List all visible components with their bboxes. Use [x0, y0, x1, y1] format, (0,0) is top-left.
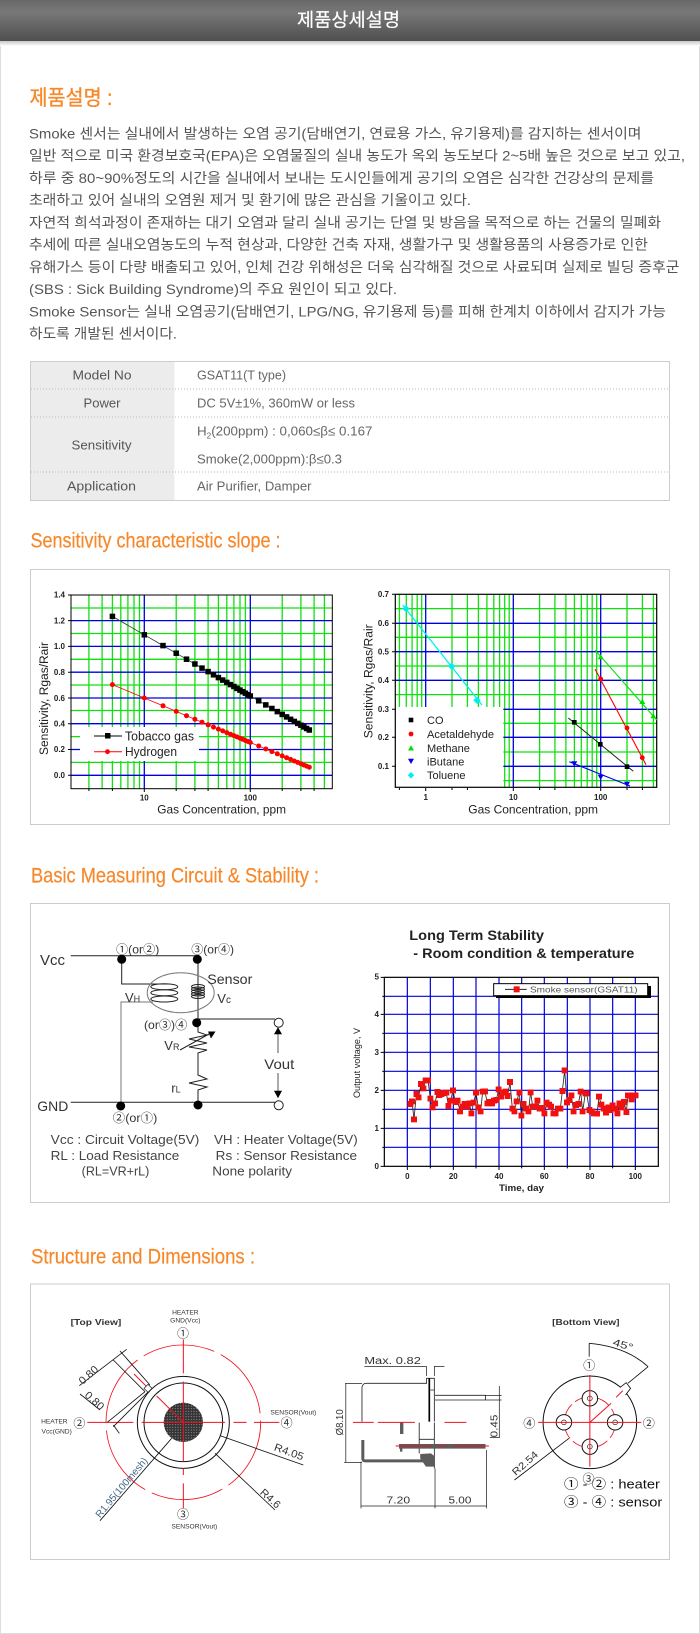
product description text: 추세에 따른 실내오염농도의 누적 현상과, 다양한 건축 자재, 생활가구 및 생활용품의 사용증가로 인한	[29, 237, 648, 253]
outer dashed circle	[106, 1345, 261, 1500]
top view labels: GND(Vcc)	[170, 1317, 200, 1324]
axis labels: 0.2	[54, 745, 66, 754]
axis labels: 0.4	[54, 720, 66, 728]
legend: Tobacco gas	[125, 730, 194, 744]
panel: circuit and stability	[30, 904, 670, 1202]
row: application	[67, 478, 312, 494]
axis labels: 1.0	[54, 642, 66, 651]
legend: CO	[427, 715, 444, 727]
series: CO	[568, 718, 633, 771]
top view labels: SENSOR(Vout)	[171, 1524, 217, 1531]
top view labels: 0.80	[77, 1364, 101, 1387]
row: sensitivity	[72, 424, 372, 467]
axis labels: 100	[594, 793, 608, 802]
variable arrow	[180, 1034, 209, 1050]
product description text: 하루 중 80~90%정도의 시간을 실내에서 보내는 도시인들에게 공기의 오염은 심각한 건강상의 문제를	[29, 170, 654, 186]
top view labels	[41, 1309, 316, 1531]
axis labels: 1.4	[54, 590, 66, 600]
row: power: DC 5V±1%, 360mW or less	[197, 396, 355, 411]
side view labels: Ø8.10	[335, 1409, 346, 1435]
axis labels: 0.6	[54, 694, 66, 703]
dashed pitch circle	[564, 1397, 615, 1448]
bottom view labels: ②	[643, 1416, 655, 1430]
heading: product description: 제품설명 :	[30, 87, 112, 110]
heading: sensitivity characteristic slope: Sensitivity characteristic slope :	[30, 528, 280, 552]
axis labels: 40	[495, 1172, 504, 1181]
body circle	[543, 1376, 637, 1469]
bottom view labels: ④	[523, 1416, 535, 1430]
axis labels: 0.1	[378, 762, 390, 771]
axis labels: 5	[375, 972, 380, 982]
axis labels: 1.2	[54, 616, 66, 626]
circuit legend: None polarity	[212, 1164, 293, 1178]
bottom view labels: ①	[583, 1358, 595, 1372]
axis labels: 0.7	[378, 590, 390, 599]
circuit labels: GND	[37, 1098, 68, 1114]
legend	[494, 984, 651, 998]
bottom view labels	[510, 1317, 655, 1486]
mesh	[164, 1403, 203, 1442]
dimension lines	[514, 1343, 648, 1480]
bottom view labels: ③	[582, 1472, 595, 1486]
legend: Hydrogen	[125, 745, 177, 759]
circuit legend: (RL=VR+rL)	[82, 1164, 149, 1178]
circuit legend: VH : Heater Voltage(5V)	[214, 1133, 358, 1147]
axis labels	[352, 972, 643, 1193]
center lines	[87, 1339, 279, 1508]
legend: Acetaldehyde	[427, 729, 494, 741]
top view labels: R4.05	[272, 1442, 305, 1463]
heading: structure and dimensions: Structure and Dimensions :	[31, 1244, 255, 1268]
bottom view labels: R2.54	[510, 1449, 541, 1478]
product description text: 하도록 개발된 센서이다.	[29, 326, 177, 342]
axis labels: Sensitivity, Rgas/Rair	[364, 624, 376, 738]
drawing: bottom view	[510, 1317, 663, 1510]
chart: long term stability	[352, 928, 658, 1193]
nodes	[116, 955, 283, 1110]
series: tobacco gas	[112, 616, 309, 730]
axis labels: 10	[509, 793, 518, 802]
axis labels: 0.8	[54, 668, 66, 677]
axis labels: 100	[629, 1172, 643, 1181]
series: acetaldehyde	[595, 669, 646, 765]
center lines	[538, 1375, 641, 1467]
circuit labels: Sensor	[207, 971, 253, 987]
axis labels: 0.2	[378, 733, 390, 742]
series: ibutane	[569, 761, 630, 787]
axis labels: 0.3	[378, 705, 390, 714]
chart title	[409, 928, 635, 961]
legend	[396, 707, 503, 787]
product description text: 자연적 희석과정이 존재하는 대기 오염과 달리 실내 공기는 단열 및 방음을 목적으로 하는 건물의 밀폐화	[29, 214, 661, 230]
row: sensitivity: Sensitivity	[72, 438, 132, 452]
pin legend: ③ - ④ : sensor	[564, 1495, 663, 1510]
axis labels: 1	[375, 1124, 380, 1133]
axis labels: Gas Concentration, ppm	[157, 802, 286, 816]
housing outline	[362, 1378, 486, 1468]
product description text	[29, 126, 685, 342]
circuit diagram	[37, 942, 358, 1178]
pin legend: ① - ② : heater	[564, 1477, 660, 1492]
circuit labels: VH	[125, 990, 140, 1005]
row: model no: Model No	[72, 368, 132, 383]
resistors	[189, 1022, 207, 1102]
chart title: Long Term Stability	[409, 928, 545, 943]
circuit legend: Vcc : Circuit Voltage(5V)	[51, 1133, 199, 1147]
axis labels: 3	[375, 1048, 380, 1057]
row: sensitivity: Smoke(2,000ppm):β≤0.3	[197, 452, 342, 467]
series: smoke sensor	[410, 1070, 636, 1119]
dimension lines	[79, 1349, 303, 1521]
legend: Smoke sensor(GSAT11)	[530, 984, 638, 994]
axis labels: 0	[375, 1162, 380, 1171]
bottom view labels: [Bottom View]	[552, 1317, 620, 1327]
drawing: side view	[335, 1356, 502, 1508]
series: hydrogen	[112, 685, 309, 767]
axis labels: Output voltage, V	[352, 1028, 362, 1098]
top view labels: ③	[177, 1507, 189, 1521]
top view labels: R1.95(100mesh)	[94, 1456, 151, 1520]
top view labels: R4.6	[257, 1487, 283, 1511]
header title: 제품상세설명	[297, 10, 400, 30]
side view labels: Max. 0.82	[364, 1356, 421, 1367]
top view labels: HEATER	[41, 1419, 68, 1426]
product description text: (SBS : Sick Building Syndrome)의 주요 원인이 되고 있다.	[29, 281, 397, 297]
circuit labels: Vc	[217, 991, 231, 1006]
series: methane	[595, 650, 657, 720]
row: power	[84, 396, 355, 411]
circuit labels: ②(or①)	[113, 1111, 157, 1125]
circuit labels: rL	[171, 1080, 181, 1096]
product description text: 유해가스 등이 다량 배출되고 있어, 인체 건강 위해성은 더욱 심각해질 것으로 사료되며 실제로 빌딩 증후군	[29, 259, 680, 275]
legend: Toluene	[427, 770, 466, 782]
axis labels: 4	[375, 1010, 380, 1019]
bottom view labels: 45°	[611, 1337, 634, 1354]
chart: tobacco gas and hydrogen sensitivity	[39, 590, 332, 816]
chart: gas selectivity	[364, 590, 657, 816]
row: model no: GSAT11(T type)	[197, 368, 286, 383]
pin legend	[564, 1477, 663, 1510]
top view labels: ④	[281, 1416, 293, 1430]
axis labels: 0.4	[378, 676, 390, 685]
panel: sensitivity charts	[30, 570, 670, 824]
circuit labels: ③(or④)	[191, 942, 234, 956]
circuit legend: Rs : Sensor Resistance	[216, 1149, 357, 1163]
pins	[556, 1391, 623, 1454]
row: application: Application	[67, 478, 136, 494]
side view labels	[335, 1356, 500, 1507]
center lines	[353, 1422, 489, 1446]
axis labels	[39, 590, 286, 816]
axis labels: 1	[423, 793, 428, 802]
dimension lines	[344, 1366, 502, 1508]
side view labels: 7.20	[387, 1496, 411, 1507]
axis labels: 10	[140, 794, 149, 802]
row: application: Air Purifier, Damper	[197, 478, 312, 494]
row: power: Power	[84, 396, 121, 411]
legend	[80, 727, 199, 761]
top view labels: 0.80	[82, 1389, 106, 1413]
axis labels: 20	[449, 1172, 458, 1181]
axis labels: 0.0	[54, 771, 66, 780]
axis labels	[364, 590, 608, 816]
circuit legend	[51, 1133, 358, 1178]
side view labels: 0.45	[489, 1414, 500, 1437]
product description text: 초래하고 있어 실내의 오염원 제거 및 환기에 많은 관심을 기울이고 있다.	[29, 192, 471, 208]
axis labels: 60	[540, 1172, 549, 1181]
sensor element	[147, 973, 214, 1013]
top view labels: Vcc(GND)	[42, 1429, 72, 1436]
heading: basic measuring circuit and stability: Basic Measuring Circuit & Stability :	[31, 864, 319, 888]
circuit labels: Vout	[264, 1056, 294, 1072]
row: sensitivity: (200ppm) : 0,060≤β≤ 0.167	[211, 424, 372, 439]
circuit labels: Vcc	[40, 952, 65, 969]
axis labels: Sensitivity, Rgas/Rair	[39, 642, 51, 755]
sectioned parts	[361, 1423, 486, 1467]
row: sensitivity: H	[197, 424, 206, 439]
product description text: Smoke 센서는 실내에서 발생하는 오염 공기(담배연기, 연료용 가스, 유기용제)를 감지하는 센서이며	[29, 126, 642, 142]
top view labels: ②	[73, 1416, 85, 1430]
series: toluene	[402, 605, 482, 705]
row: sensitivity: 2	[207, 432, 212, 441]
product description text: 일반 적으로 미국 환경보호국(EPA)은 오염물질의 실내 농도가 옥외 농도보다 2~5배 높은 것으로 보고 있고,	[29, 148, 685, 164]
legend: Methane	[427, 743, 470, 755]
spec table	[30, 362, 670, 500]
circuit labels: ①(or②)	[116, 942, 159, 956]
axis labels: 2	[375, 1086, 380, 1095]
row: model no	[72, 368, 286, 383]
body circles	[137, 1376, 229, 1468]
chart title: - Room condition & temperature	[413, 946, 635, 961]
axis labels: 80	[586, 1172, 595, 1181]
top view labels: HEATER	[172, 1309, 199, 1316]
legend: iButane	[427, 756, 464, 768]
top view labels: SENSOR(Vout)	[270, 1410, 316, 1417]
top view labels: ①	[177, 1327, 189, 1341]
panel: structure and dimensions	[30, 1284, 670, 1560]
axis labels: 100	[244, 794, 258, 802]
axis labels: 0.6	[378, 619, 390, 628]
circuit labels	[37, 942, 294, 1125]
header bar	[0, 0, 700, 46]
axis labels: Time, day	[499, 1183, 544, 1193]
axis labels: 0	[405, 1172, 410, 1181]
circuit labels: VR	[164, 1038, 180, 1053]
axis labels: 0.5	[378, 648, 390, 656]
circuit labels: (or③)④	[144, 1018, 187, 1032]
top view labels: [Top View]	[71, 1317, 121, 1327]
side view labels: 5.00	[448, 1496, 472, 1507]
axis labels: Gas Concentration, ppm	[468, 802, 598, 816]
drawing: top view	[41, 1309, 316, 1531]
key tab	[620, 1383, 631, 1395]
product description text: Smoke Sensor는 실내 오염공기(담배연기, LPG/NG, 유기용제 등)를 피해 한계치 이하에서 감지가 가능	[29, 304, 666, 320]
circuit legend: RL : Load Resistance	[51, 1149, 179, 1163]
vout arrows	[277, 1034, 279, 1092]
